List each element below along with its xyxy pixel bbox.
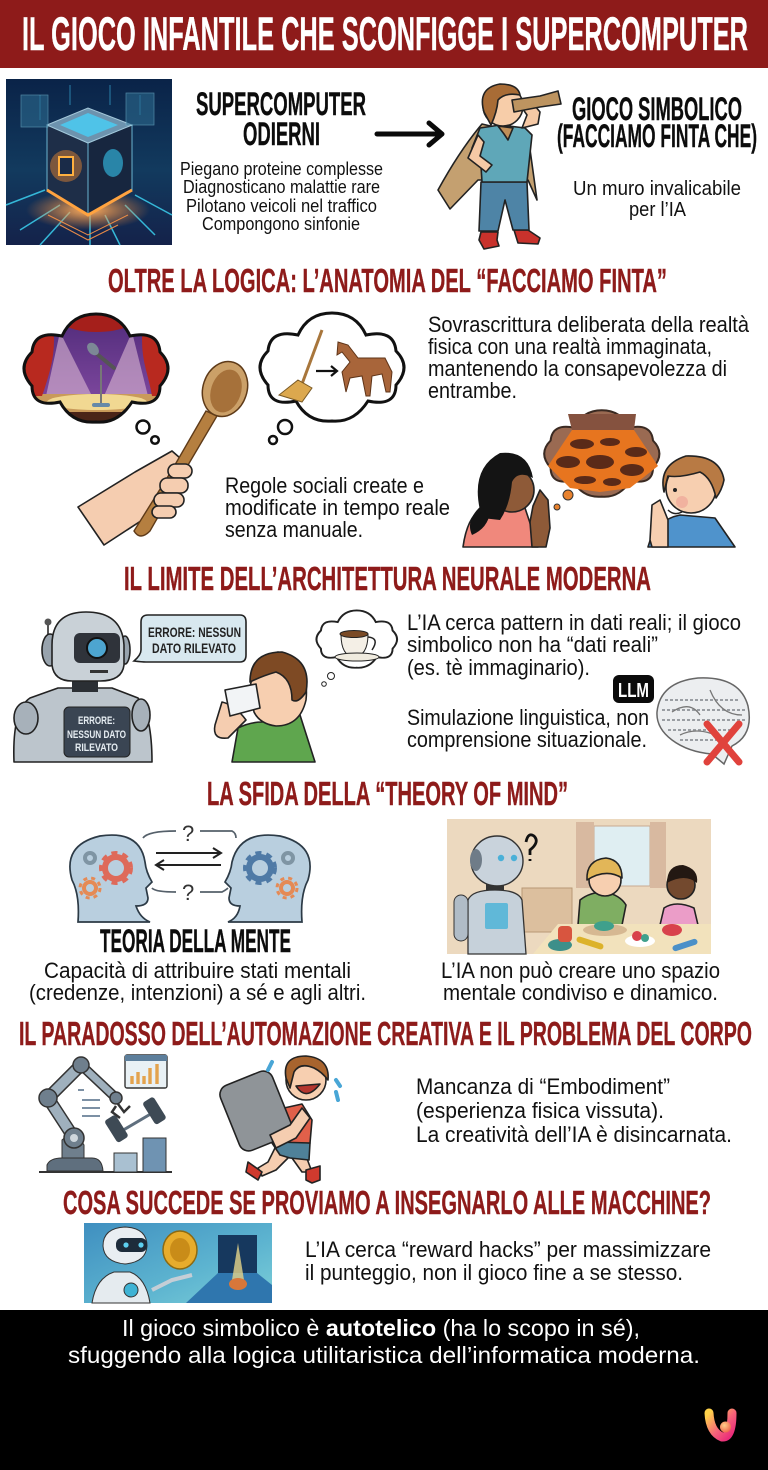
text: social rules: senza manuale. bbox=[225, 517, 363, 542]
chest display: RILEVATO bbox=[75, 742, 118, 754]
text: pattern search bbox=[407, 610, 741, 680]
illustration: two heads exchanging thoughts: ? bbox=[182, 821, 194, 846]
callout: robot speech bubble bbox=[134, 615, 246, 662]
text: linguistic simulation bbox=[407, 705, 649, 752]
text: theory definition: (credenze, intenzioni) a sé e agli altri. bbox=[29, 980, 366, 1005]
callout: robot speech bubble: DATO RILEVATO bbox=[152, 640, 236, 656]
text: social rules bbox=[225, 473, 450, 542]
text: shared mental space: mentale condiviso e dinamico. bbox=[443, 980, 718, 1005]
text: conclusion: sfuggendo alla logica utilitaristica dell’informatica moderna. bbox=[68, 1342, 700, 1368]
illustration: boy whispering bbox=[648, 456, 735, 547]
illustration: robot with error display bbox=[14, 612, 152, 762]
heading: supercomputer odierni: ODIERNI bbox=[243, 116, 320, 152]
illustration: child with telescope and cape bbox=[438, 84, 561, 249]
text: reward hacks: il punteggio, non il gioco fine a se stesso. bbox=[305, 1260, 683, 1285]
text: deliberate overwrite: mantenendo la consapevolezza di bbox=[428, 356, 727, 381]
text: un muro invalicabile: per l’IA bbox=[629, 199, 687, 221]
icon: LLM badge bbox=[613, 675, 654, 703]
icon: thought bubbles bbox=[269, 420, 292, 444]
text: supercomputer abilities: Piegano proteine complesse bbox=[180, 159, 383, 179]
text: deliberate overwrite: fisica con una realtà immaginata, bbox=[428, 334, 712, 359]
illustration: wooden spoon held in hand bbox=[78, 356, 255, 545]
panel: neural architecture limit bbox=[14, 610, 749, 764]
illustration: laughing boy carrying pillow bbox=[217, 1056, 340, 1183]
panel: anatomy of pretend bbox=[20, 310, 750, 547]
illustration: theatre thought cloud bbox=[20, 310, 172, 426]
text: supercomputer abilities bbox=[180, 159, 383, 234]
text: conclusion bbox=[68, 1315, 700, 1368]
text: social rules: modificate in tempo reale bbox=[225, 495, 450, 520]
icon: imaginary tea thought cloud bbox=[316, 610, 397, 686]
heading: gioco simbolico bbox=[557, 91, 757, 154]
text: conclusion: Il gioco simbolico è autotelico (ha lo scopo in sé), bbox=[122, 1315, 640, 1341]
illustration: two heads exchanging thoughts bbox=[70, 821, 310, 922]
panel: conclusion footer bbox=[0, 1310, 768, 1470]
arrow bbox=[377, 123, 442, 145]
text: deliberate overwrite: entrambe. bbox=[428, 378, 517, 403]
text: pattern search: simbolico non ha “dati reali” bbox=[407, 632, 658, 657]
illustration: girl whispering bbox=[463, 453, 550, 547]
chest display: NESSUN DATO bbox=[67, 729, 126, 741]
text: supercomputer abilities: Pilotano veicoli nel traffico bbox=[186, 196, 377, 216]
panel: supercomputer vs symbolic play bbox=[6, 79, 757, 249]
text: pattern search: L’IA cerca pattern in dati reali; il gioco bbox=[407, 610, 741, 635]
chest display bbox=[64, 707, 130, 757]
callout: robot speech bubble: ERRORE: NESSUN bbox=[148, 624, 241, 640]
illustration: two heads exchanging thoughts: ? bbox=[182, 880, 194, 905]
illustration: supercomputer cube bbox=[6, 79, 172, 245]
panel: theory of mind bbox=[29, 819, 720, 1005]
illustration: lava floor thought cloud bbox=[544, 410, 659, 510]
chest display: ERRORE: bbox=[78, 715, 115, 727]
icon: LLM badge: LLM bbox=[618, 680, 649, 702]
heading: supercomputer odierni: SUPERCOMPUTER bbox=[196, 86, 366, 122]
illustration: robot and reward coin bbox=[84, 1223, 272, 1303]
text: embodiment: Mancanza di “Embodiment” bbox=[416, 1074, 670, 1099]
text: shared mental space bbox=[441, 958, 720, 1005]
heading: teoria della mente: TEORIA DELLA MENTE bbox=[100, 923, 291, 959]
text: un muro invalicabile bbox=[573, 178, 741, 221]
text: linguistic simulation: comprensione situazionale. bbox=[407, 727, 647, 752]
text: embodiment bbox=[416, 1074, 732, 1147]
illustration: child pretending to drink bbox=[215, 652, 315, 762]
text: supercomputer abilities: Compongono sinfonie bbox=[202, 214, 360, 234]
icon: thought bubbles bbox=[136, 420, 159, 444]
text: un muro invalicabile: Un muro invalicabile bbox=[573, 178, 741, 200]
icon: logo bbox=[709, 1413, 732, 1437]
heading: supercomputer odierni bbox=[196, 86, 366, 152]
illustration: broom to horse thought cloud bbox=[260, 313, 404, 421]
text: supercomputer abilities: Diagnosticano malattie rare bbox=[183, 177, 380, 197]
panel: embodiment bbox=[39, 1055, 732, 1183]
banner: main title bbox=[0, 0, 768, 68]
illustration: robot arm and barbell bbox=[39, 1055, 172, 1172]
text: embodiment: La creatività dell’IA è disincarnata. bbox=[416, 1122, 732, 1147]
icon: crossed out brain bbox=[657, 678, 749, 764]
text: pattern search: (es. tè immaginario). bbox=[407, 655, 590, 680]
text: theory definition bbox=[29, 958, 366, 1005]
text: reward hacks bbox=[305, 1237, 711, 1285]
text: deliberate overwrite bbox=[428, 312, 750, 403]
text: social rules: Regole sociali create e bbox=[225, 473, 424, 498]
text: theory definition: Capacità di attribuire stati mentali bbox=[44, 958, 351, 983]
text: shared mental space: L’IA non può creare uno spazio bbox=[441, 958, 720, 983]
text: embodiment: (esperienza fisica vissuta). bbox=[416, 1098, 664, 1123]
text: reward hacks: L’IA cerca “reward hacks” per massimizzare bbox=[305, 1237, 711, 1262]
text: linguistic simulation: Simulazione linguistica, non bbox=[407, 705, 649, 730]
panel: reward hacks bbox=[84, 1223, 711, 1303]
illustration: robot and children playing with clay bbox=[447, 819, 711, 954]
